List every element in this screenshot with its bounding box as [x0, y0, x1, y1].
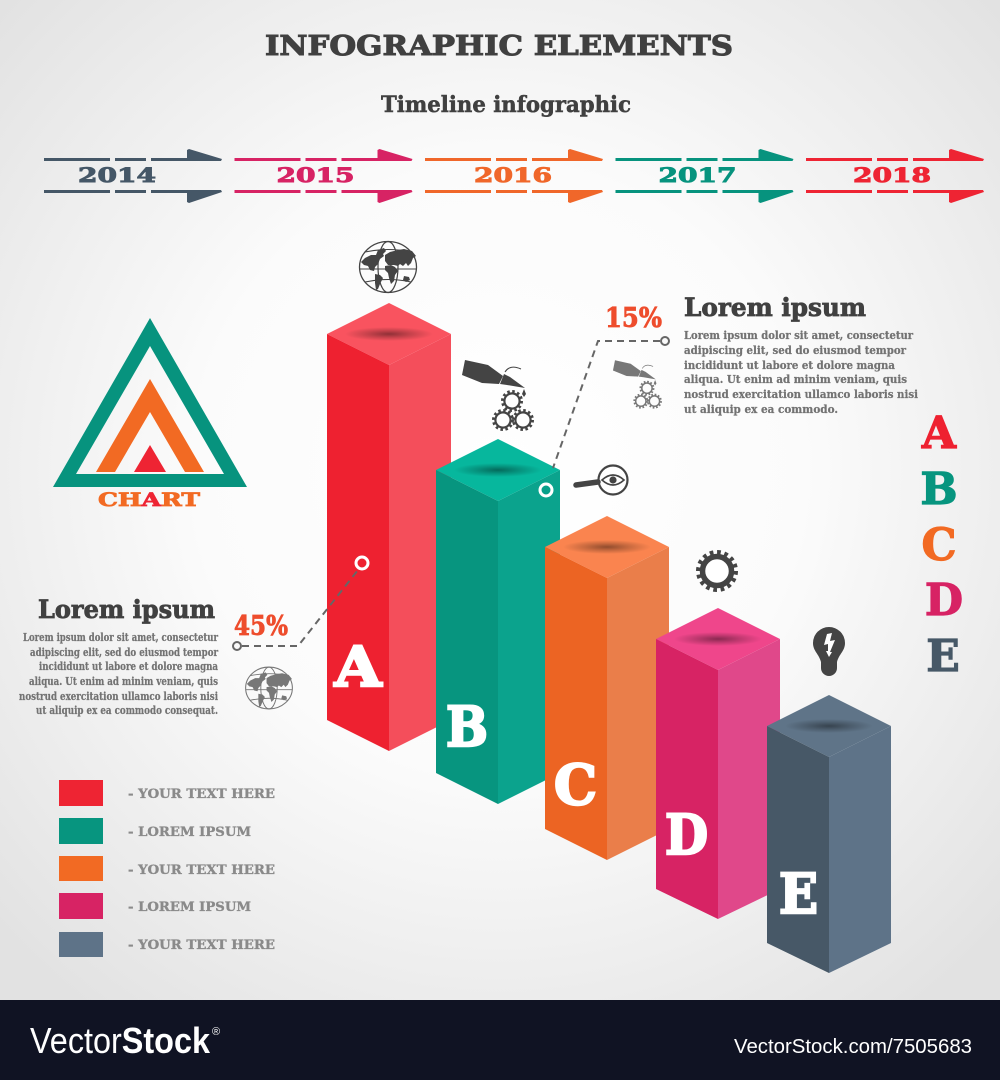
timeline arrow 2014: 2014 — [78, 163, 156, 187]
45 percent value: 45% — [234, 611, 288, 642]
paragraph — [19, 631, 218, 717]
letter key: D — [925, 575, 963, 626]
legend item D: - LOREM IPSUM — [128, 900, 251, 915]
dashed leader A — [242, 570, 358, 646]
bar C — [545, 516, 669, 860]
callout: 15% — [540, 293, 918, 496]
bar B: B — [446, 694, 488, 759]
paragraph: ut aliquip ex ea commodo consequat. — [36, 704, 218, 717]
registered mark: ® — [212, 1026, 220, 1038]
bar A: A — [333, 634, 383, 699]
timeline arrow 2015: 2015 — [276, 163, 354, 187]
legend item A: - YOUR TEXT HERE — [128, 787, 275, 802]
icon: oil can and gears — [462, 360, 533, 430]
timeline arrow 2017 — [616, 149, 794, 203]
timeline arrow 2017: 2017 — [658, 163, 736, 187]
bar B — [436, 439, 560, 804]
heading: Lorem ipsum — [38, 595, 215, 624]
bar C: C — [554, 752, 597, 817]
letter key: E — [926, 631, 960, 682]
legend — [59, 780, 275, 957]
timeline arrow 2015 — [234, 149, 412, 203]
dashed leader B — [553, 341, 660, 468]
bar A — [327, 303, 451, 751]
timeline arrow 2014 — [44, 149, 222, 203]
bar D — [656, 608, 780, 919]
legend item E — [59, 932, 275, 957]
chart logo — [53, 318, 247, 511]
legend item E: - YOUR TEXT HERE — [128, 938, 275, 953]
timeline — [44, 149, 984, 203]
timeline arrow 2018: 2018 — [853, 163, 931, 187]
timeline arrow 2016: 2016 — [474, 163, 552, 187]
paragraph: nostrud exercitation ullamco laboris nisi — [19, 690, 218, 703]
small globe — [246, 667, 292, 709]
legend item B — [59, 818, 251, 844]
legend item C: - YOUR TEXT HERE — [128, 863, 275, 878]
paragraph: adipiscing elit, sed do eiusmod tempor — [30, 646, 218, 659]
letter key: C — [921, 520, 957, 571]
icon: gear — [698, 552, 736, 590]
icon: light bulb — [813, 627, 845, 676]
paragraph: incididunt ut labore et dolore magna — [684, 359, 895, 372]
letter key: A — [921, 408, 957, 459]
legend item D — [59, 893, 251, 919]
small oil icon — [613, 360, 661, 408]
icon: magnifier eye — [576, 466, 628, 494]
heading: Lorem ipsum — [684, 293, 866, 322]
timeline arrow 2016 — [425, 149, 603, 203]
legend item B: - LOREM IPSUM — [128, 825, 251, 840]
legend item A — [59, 780, 275, 806]
paragraph: ut aliquip ex ea commodo. — [684, 403, 838, 416]
paragraph: aliqua. Ut enim ad minim veniam, quis — [684, 373, 907, 386]
bar E — [767, 695, 891, 973]
paragraph: Lorem ipsum dolor sit amet, consectetur — [684, 329, 913, 342]
callout: 45% — [19, 557, 368, 717]
bar E: E — [779, 861, 818, 926]
footer logo: VectorStock — [30, 1020, 211, 1061]
timeline arrow 2018 — [806, 149, 984, 203]
letter key — [920, 408, 963, 682]
paragraph: Lorem ipsum dolor sit amet, consectetur — [23, 631, 218, 644]
subtitle: Timeline infographic — [381, 92, 631, 118]
legend item C — [59, 856, 275, 881]
15 percent value: 15% — [605, 303, 662, 334]
footer url: VectorStock.com/7505683 — [734, 1036, 972, 1058]
paragraph: incididunt ut labore et dolore magna — [39, 660, 218, 673]
paragraph: nostrud exercitation ullamco laboris nisi — [684, 388, 918, 401]
bar D: D — [665, 802, 708, 867]
chart label: CH ART — [98, 489, 200, 511]
paragraph: aliqua. Ut enim ad minim veniam, quis — [29, 675, 218, 688]
paragraph: adipiscing elit, sed do eiusmod tempor — [684, 344, 906, 357]
icon: globe — [360, 242, 416, 292]
title: INFOGRAPHIC ELEMENTS — [265, 31, 733, 62]
footer bar — [0, 1000, 1000, 1080]
letter key: B — [920, 464, 958, 515]
paragraph — [684, 329, 918, 416]
